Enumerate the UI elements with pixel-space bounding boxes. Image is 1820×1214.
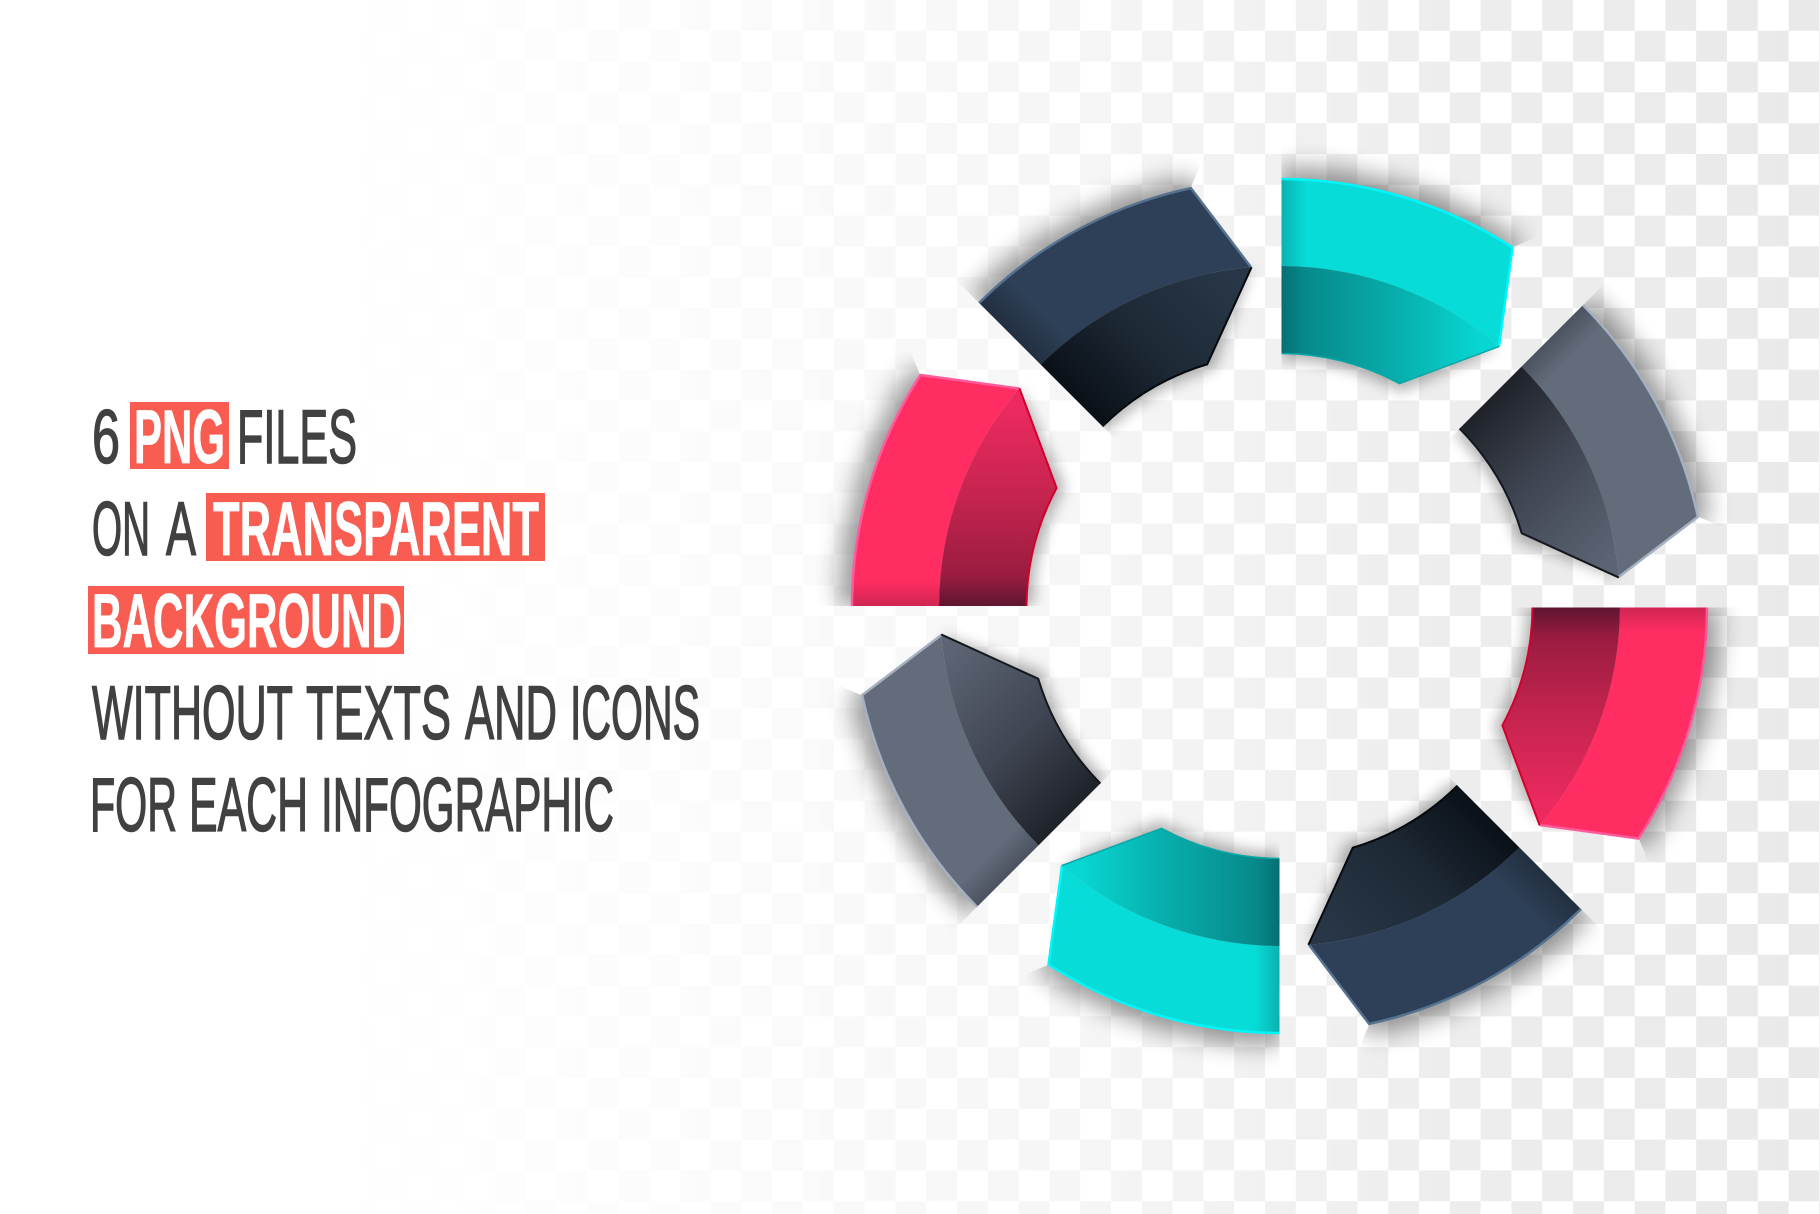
line 4: WITHOUT TEXTS AND ICONS [92,671,700,756]
line 5: FOR EACH INFOGRAPHIC: INFOGRAPHIC [321,763,614,848]
line 1: 6 PNG FILES: FILES [237,395,357,480]
segment: teal bottom left [1041,820,1280,1046]
segment: teal top right [1282,166,1520,392]
segment: red left upper [839,368,1065,606]
segment: grey right upper [1452,288,1722,581]
line 1: 6 PNG FILES [92,395,357,480]
line 2: ON A TRANSPARENT: A [166,487,196,572]
line 3: BACKGROUND [88,579,404,664]
line 5: FOR EACH INFOGRAPHIC: EACH [189,763,308,848]
line 2: ON A TRANSPARENT: ON [92,487,150,572]
line 2: ON A TRANSPARENT: TRANSPARENT [213,487,539,572]
line 3: BACKGROUND: BACKGROUND [92,579,402,664]
line 5: FOR EACH INFOGRAPHIC: FOR [90,763,177,848]
line 4: WITHOUT TEXTS AND ICONS: ICONS [570,671,700,756]
text block [88,395,700,848]
line 2: ON A TRANSPARENT [92,487,545,572]
ring of eight segments [824,152,1734,1060]
segment: navy top left [962,164,1255,434]
line 1: 6 PNG FILES: PNG [134,395,225,480]
segment: red right lower [1494,608,1720,846]
segment: grey left lower [838,631,1108,924]
line 4: WITHOUT TEXTS AND ICONS: TEXTS [306,671,451,756]
line 5: FOR EACH INFOGRAPHIC [90,763,614,848]
line 1: 6 PNG FILES: 6 [92,395,120,480]
segment: navy bottom right [1305,778,1598,1048]
line 4: WITHOUT TEXTS AND ICONS: WITHOUT [92,671,293,756]
line 4: WITHOUT TEXTS AND ICONS: AND [465,671,557,756]
